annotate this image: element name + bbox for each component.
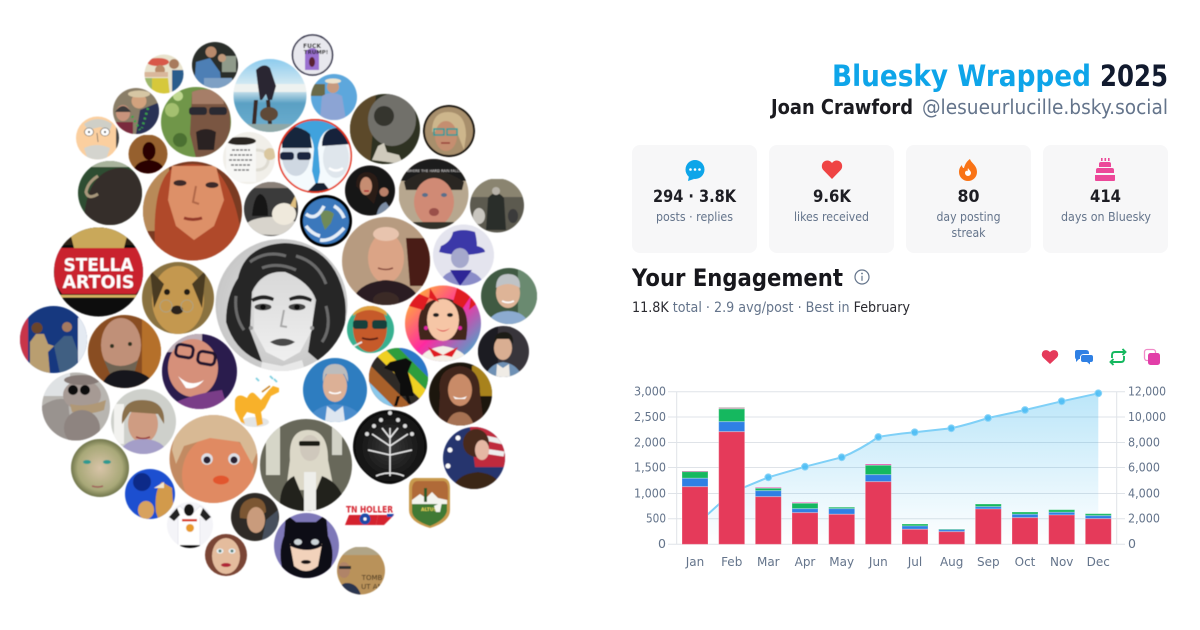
right axis labels: 12,000 <box>1128 384 1166 398</box>
avatar: group in festive hats <box>144 54 186 96</box>
bar: Jul <box>902 524 928 544</box>
avatar: smiling woman with long curly hair <box>429 362 494 426</box>
panel: likes received: 9.6K <box>813 187 852 207</box>
left axis labels <box>634 384 666 551</box>
panel: day posting streak: day posting <box>936 210 1000 224</box>
avatar: George Takei <box>481 268 538 325</box>
avatar: Catwoman comic <box>274 513 340 580</box>
avatar: dog and cat on blue <box>125 469 175 519</box>
right axis labels: 4,000 <box>1128 486 1160 500</box>
icon: heart <box>822 160 842 179</box>
icon: likes heart <box>1042 350 1058 364</box>
avatar: Bette Davis <box>205 534 247 576</box>
avatar: rainbow stripes with silhouette <box>369 348 429 408</box>
month labels: Jan <box>685 555 704 569</box>
avatar: cat in sunglasses <box>42 372 110 446</box>
month labels <box>685 555 1110 569</box>
icon: birthday cake <box>1095 158 1115 181</box>
avatar: person with dog on beach <box>233 59 307 134</box>
bar: Sep <box>975 504 1001 544</box>
panel: day posting streak: streak <box>952 226 986 240</box>
avatar: man in sunglasses with foliage <box>161 87 231 158</box>
engagement summary line: 11.8K total · 2.9 avg/post · Best in February <box>632 300 910 316</box>
month labels: Jun <box>868 555 888 569</box>
panel: posts and replies: posts · replies <box>656 210 733 224</box>
avatar: coffee mug with text <box>223 132 276 184</box>
avatar: man by sign with Arabic text: UT AN <box>361 583 383 591</box>
panel: day posting streak <box>906 145 1031 253</box>
panel: posts and replies <box>632 145 757 253</box>
left axis labels: 500 <box>646 512 666 526</box>
bar: Dec <box>1085 514 1111 544</box>
panel: days on Bluesky <box>1043 145 1168 253</box>
bar: Jun <box>865 464 891 544</box>
month labels: May <box>829 555 854 569</box>
avatar: jersey with gorilla <box>167 502 213 548</box>
avatar: young man in blue blazer <box>478 326 530 380</box>
avatar: earth from space <box>300 195 352 247</box>
left axis labels: 2,500 <box>634 410 666 424</box>
avatar: man by sign with Arabic text <box>337 547 385 595</box>
left axis labels: 1,500 <box>634 460 666 474</box>
avatar: blue-tinted cowboy <box>433 224 495 288</box>
avatar: default silhouette <box>128 135 168 175</box>
avatar: woman with short brown hair <box>231 493 279 541</box>
month labels: Aug <box>940 555 963 569</box>
avatar: purple minion with slogan: TRUMP! <box>304 50 328 56</box>
avatar: orange camel cartoon <box>235 376 279 427</box>
month labels: Dec <box>1087 555 1110 569</box>
icon: flame <box>959 159 977 181</box>
avatar: woman with teal glasses <box>423 105 475 157</box>
panel: likes received <box>769 145 894 253</box>
logo: TN Holler <box>345 506 394 525</box>
avatar: gorilla <box>350 94 420 164</box>
avatar: Stella Artois logo <box>54 227 144 317</box>
profile name and handle <box>769 95 1168 119</box>
right axis labels: 8,000 <box>1128 436 1160 450</box>
avatar: Joan Crawford portrait <box>215 239 349 374</box>
month labels: Jul <box>907 555 922 569</box>
avatar: smiling man with glasses, purple tint <box>162 334 238 410</box>
icon: quotes copy <box>1144 350 1160 365</box>
month labels: Feb <box>721 555 742 569</box>
avatar: blonde woman in leather jacket <box>260 419 352 512</box>
month labels: Nov <box>1050 555 1073 569</box>
avatar: purple minion with slogan <box>292 35 332 75</box>
avatar: man in black hat: WHERE THE HARD RAIN FALLS <box>407 169 462 173</box>
avatar: woman before American flag <box>443 427 505 490</box>
avatar: cartoon old man <box>76 116 120 160</box>
right axis labels: 6,000 <box>1128 460 1160 474</box>
avatar: couple with hat and lights <box>113 88 160 134</box>
avatar: dark-haired woman with phone <box>345 165 396 218</box>
title: Bluesky Wrapped 2025: 2025 <box>1100 59 1168 93</box>
avatar: smiling older woman <box>111 389 177 455</box>
panel: day posting streak: 80 <box>958 187 980 207</box>
chart: monthly engagement stacked bars with cumulative line <box>634 384 1166 569</box>
avatar: men outdoors <box>192 42 238 88</box>
icon: chat bubble <box>686 160 704 181</box>
avatar: man in blue suit on blue background <box>303 358 367 424</box>
logo: Altus patch <box>409 478 450 528</box>
profile name and handle: @lesueurlucille.bsky.social <box>922 95 1168 119</box>
logo: TN Holler: TN HOLLER <box>346 506 393 516</box>
avatar: Stella Artois logo: STELLA <box>64 255 134 276</box>
avatar: man in black hat <box>399 159 469 230</box>
bar: Nov <box>1049 510 1075 544</box>
avatar: White Tree of Gondor <box>353 410 427 484</box>
avatar: doll face <box>168 414 258 504</box>
avatar: blurred woman with green eyes <box>71 439 129 497</box>
avatar: Stella Artois logo: ARTOIS <box>62 272 134 293</box>
avatar: unicorn plush <box>244 182 298 236</box>
bar: Mar <box>755 487 781 544</box>
bar: May <box>829 507 855 544</box>
right axis labels: 10,000 <box>1128 410 1166 424</box>
bar: Feb <box>719 407 745 544</box>
bar: Apr <box>792 502 818 544</box>
panel: likes received: likes received <box>794 210 869 224</box>
right axis labels <box>1128 384 1166 551</box>
left axis labels: 0 <box>658 537 666 551</box>
icon: replies bubbles <box>1075 350 1093 364</box>
avatar: bald bearded man <box>88 315 162 392</box>
avatar: bald man with microphone <box>342 217 432 308</box>
avatar: pop art woman with red bows <box>405 285 481 363</box>
logo: Altus patch: ALTUS <box>421 507 437 513</box>
stacked bars <box>682 407 1111 544</box>
month labels: Apr <box>795 555 815 569</box>
panel: posts and replies: 294 · 3.8K <box>653 187 737 207</box>
chart legend <box>1042 349 1160 365</box>
right axis labels: 2,000 <box>1128 512 1160 526</box>
avatar: two people shaking hands before flags <box>20 306 88 374</box>
icon: info <box>855 270 869 284</box>
bar: Oct <box>1012 512 1038 544</box>
title: Bluesky Wrapped 2025: Bluesky Wrapped <box>832 59 1091 93</box>
heading: Your Engagement: Your Engagement <box>631 264 843 292</box>
avatar: elephant <box>77 161 144 228</box>
grid lines <box>668 392 1125 544</box>
bar: Jan <box>682 471 708 544</box>
avatar: armored walker with wolves <box>470 179 524 233</box>
avatar: comic man with sunglasses and cigarette <box>347 304 395 354</box>
avatar: man by sign with Arabic text: TOMB <box>361 574 383 582</box>
month labels: Oct <box>1015 555 1036 569</box>
avatar: purple minion with slogan: FUCK <box>303 43 321 50</box>
month labels: Sep <box>977 555 1000 569</box>
right axis labels: 0 <box>1128 537 1136 551</box>
bar: Aug <box>939 529 965 544</box>
panel: days on Bluesky: days on Bluesky <box>1061 210 1151 224</box>
avatar: red-haired woman <box>143 161 244 262</box>
avatar: man in plaid shirt <box>311 74 357 120</box>
left axis labels: 3,000 <box>634 384 666 398</box>
avatar cluster <box>20 35 538 595</box>
left axis labels: 2,000 <box>634 436 666 450</box>
profile name and handle: Joan Crawford <box>769 95 913 119</box>
avatar: dog with glasses <box>142 262 214 334</box>
cumulative area and line <box>695 390 1102 544</box>
panel: days on Bluesky: 414 <box>1090 187 1121 207</box>
left axis labels: 1,000 <box>634 486 666 500</box>
avatar: two men on blue with red border <box>278 119 352 193</box>
month labels: Mar <box>757 555 780 569</box>
icon: repost arrows <box>1110 349 1126 365</box>
